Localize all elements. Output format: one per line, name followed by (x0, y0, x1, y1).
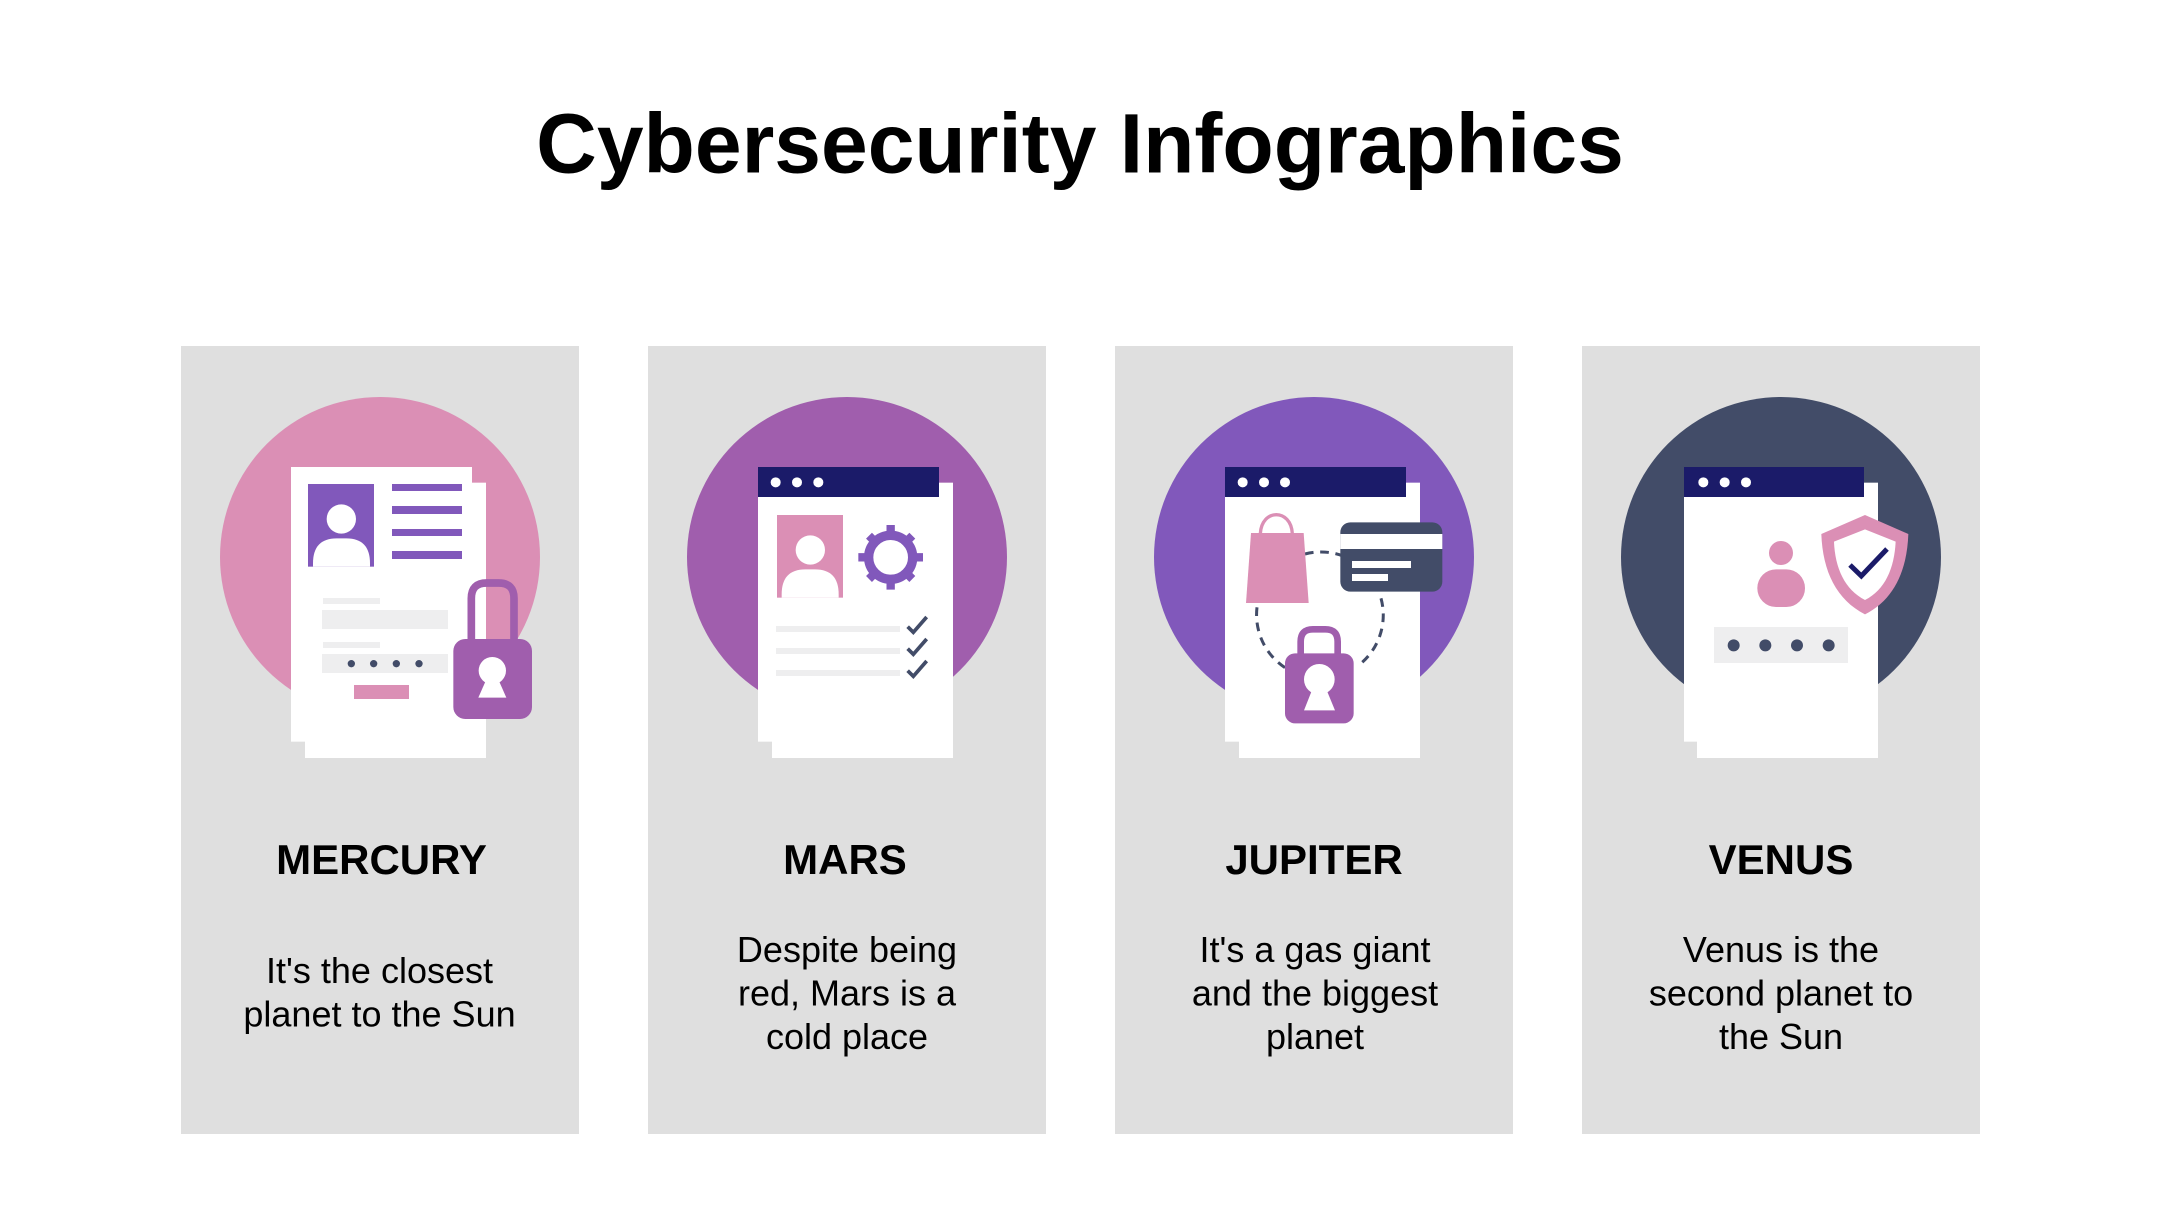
icon: padlock (1285, 629, 1354, 723)
circle backdrop (1621, 397, 1941, 717)
icon: gear (858, 525, 923, 590)
document sheets (1225, 467, 1420, 758)
illustration: settings window (687, 397, 1007, 758)
window header (1225, 467, 1406, 497)
icon: user (1757, 541, 1805, 607)
panel background (1115, 346, 1513, 1134)
title: Cybersecurity Infographics (536, 96, 1624, 190)
panel: Mercury (181, 346, 579, 1134)
illustration: secure payment window (1154, 397, 1474, 758)
icon: credit card (1340, 522, 1442, 592)
circle backdrop (687, 397, 1007, 717)
circle backdrop (220, 397, 540, 717)
illustration: protected login window (1621, 397, 1941, 758)
panel: Jupiter (1115, 346, 1513, 1134)
dashed connection ring (1257, 552, 1383, 668)
window header (1684, 467, 1864, 497)
description: and the biggest (1192, 972, 1438, 1014)
description: planet to the Sun (243, 994, 516, 1034)
description: second planet to (1649, 972, 1913, 1014)
illustration: profile document with padlock (220, 397, 540, 758)
icon: shield with check (1821, 515, 1908, 614)
text lines (392, 484, 462, 559)
description: Despite being (737, 929, 957, 970)
profile photo (777, 515, 843, 598)
description: It's the closest (266, 950, 493, 991)
password field (1714, 627, 1848, 663)
panel background (648, 346, 1046, 1134)
heading: MERCURY (276, 836, 487, 883)
description: It's a gas giant (1199, 929, 1431, 970)
description: Venus is the (1683, 929, 1879, 970)
document sheets (1684, 467, 1878, 758)
description: red, Mars is a (738, 972, 957, 1014)
heading: VENUS (1709, 836, 1853, 883)
panel: Venus (1582, 346, 1980, 1134)
description: the Sun (1719, 1016, 1843, 1057)
panel: Mars (648, 346, 1046, 1134)
window header (758, 467, 939, 497)
circle backdrop (1154, 397, 1474, 717)
description: cold place (766, 1016, 928, 1057)
login form (322, 598, 448, 699)
icon: padlock (453, 583, 532, 719)
heading: JUPITER (1225, 836, 1403, 883)
description: planet (1266, 1016, 1364, 1057)
panel background (181, 346, 579, 1134)
profile photo (308, 484, 374, 567)
panel background (1582, 346, 1980, 1134)
document sheets (758, 467, 953, 758)
icon: shopping bag (1246, 515, 1309, 603)
heading: MARS (783, 836, 907, 883)
document sheets (291, 467, 486, 758)
checklist (776, 617, 927, 676)
